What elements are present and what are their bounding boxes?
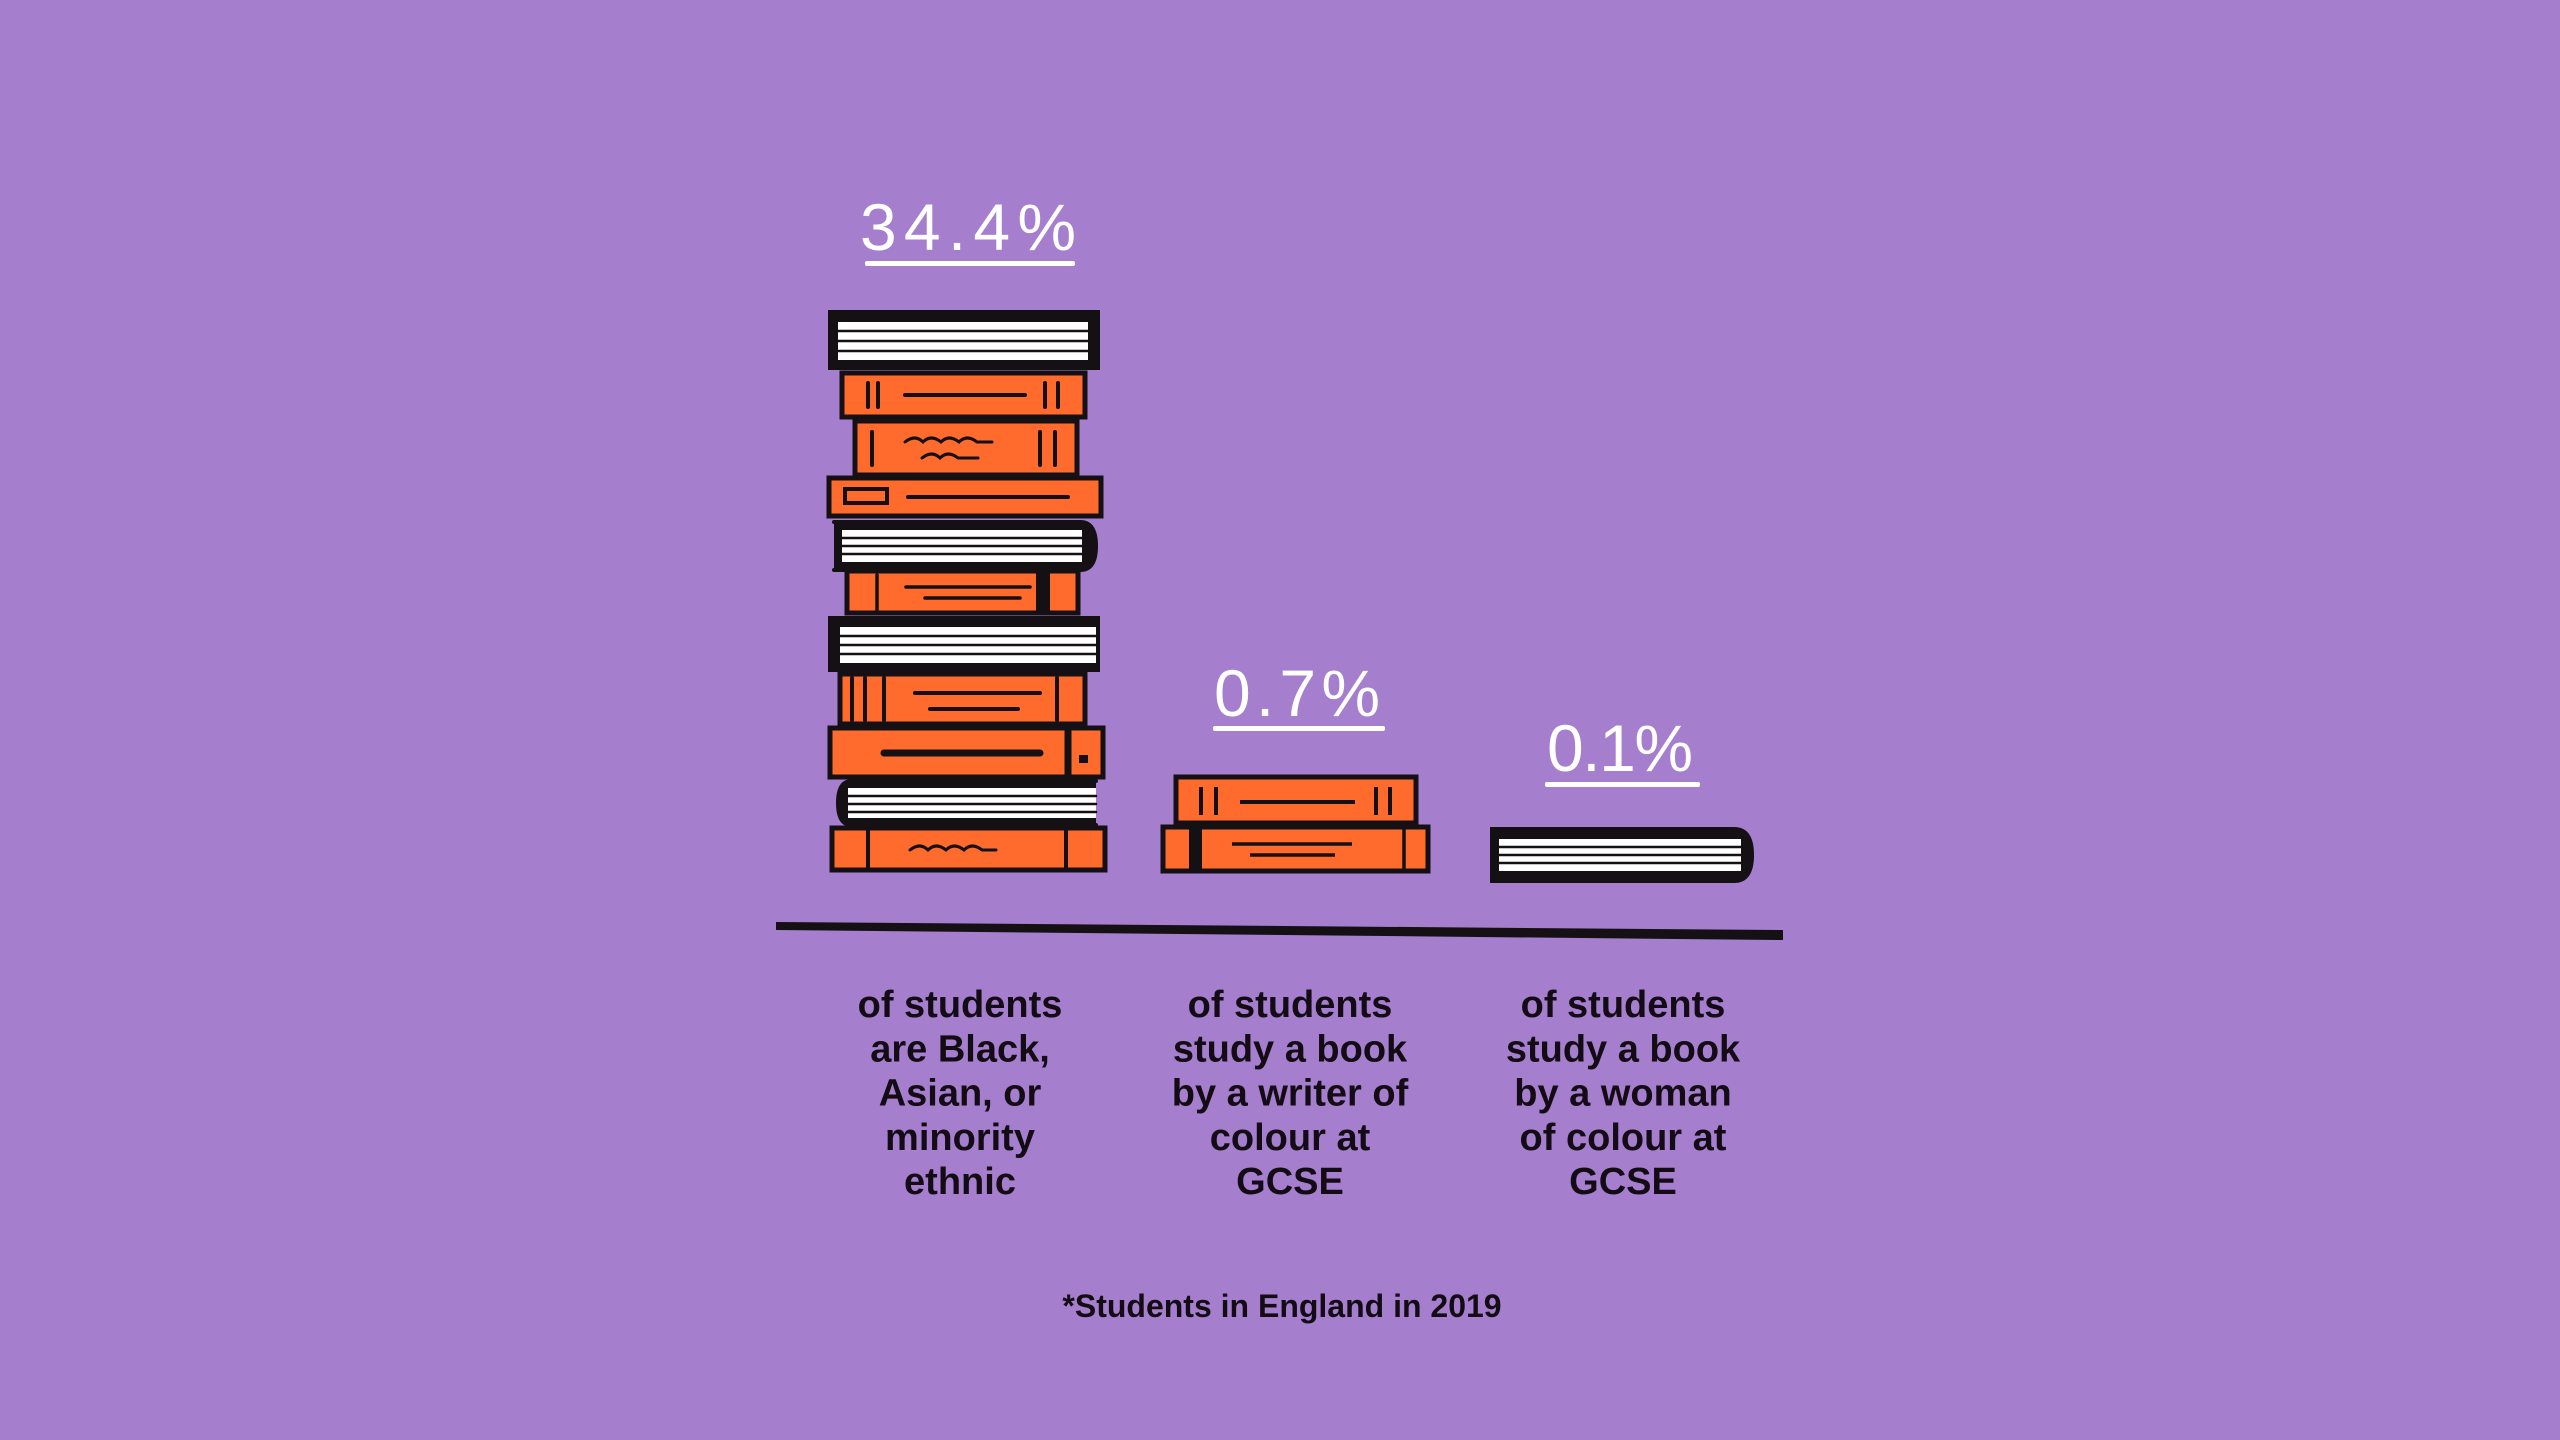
book 6 orange — [847, 571, 1078, 613]
label: column 3: of colour at — [1520, 1117, 1727, 1159]
label: column 1: ethnic — [904, 1161, 1016, 1203]
value: 0.1%: 0.1% — [1547, 711, 1693, 785]
label: column 2: GCSE — [1236, 1161, 1344, 1203]
book 3 orange — [855, 421, 1077, 475]
label: column 1: are Black, — [870, 1028, 1050, 1070]
label: column 3: study a book — [1506, 1028, 1741, 1070]
book 9 orange — [830, 728, 1103, 777]
label: column 2: study a book — [1173, 1028, 1408, 1070]
label: column 1: of students — [858, 984, 1062, 1026]
book 7 white — [830, 618, 1098, 670]
label: column 3: by a woman — [1514, 1073, 1732, 1115]
ground line — [776, 922, 1783, 940]
book 5 white rounded — [834, 522, 1096, 570]
label: column 3: of students — [1521, 984, 1725, 1026]
book 11 orange — [832, 828, 1105, 870]
book orange top — [1176, 777, 1416, 823]
book 2 orange — [842, 373, 1085, 417]
single white book (0.1%) — [1490, 829, 1752, 881]
label: column 1: minority — [885, 1117, 1035, 1159]
label: column 2: colour at — [1210, 1117, 1371, 1159]
book 4 orange — [829, 478, 1101, 516]
label: column 2: by a writer of — [1172, 1073, 1409, 1115]
label: column 1: Asian, or — [879, 1073, 1042, 1115]
value: 0.7%: 0.7% — [1214, 656, 1380, 730]
label: column 2: of students — [1188, 984, 1392, 1026]
label: column 3: GCSE — [1569, 1161, 1677, 1203]
book 8 orange — [840, 674, 1085, 724]
footnote: *Students in England in 2019 — [1062, 1288, 1502, 1324]
big stack of books (34.4%) — [829, 312, 1105, 870]
middle stack of books (0.7%) — [1163, 777, 1428, 871]
book 1 white — [830, 312, 1098, 368]
value: 34.4%: 34.4% — [860, 190, 1076, 264]
book orange bottom — [1163, 827, 1428, 871]
book 10 white rounded left — [838, 781, 1096, 825]
